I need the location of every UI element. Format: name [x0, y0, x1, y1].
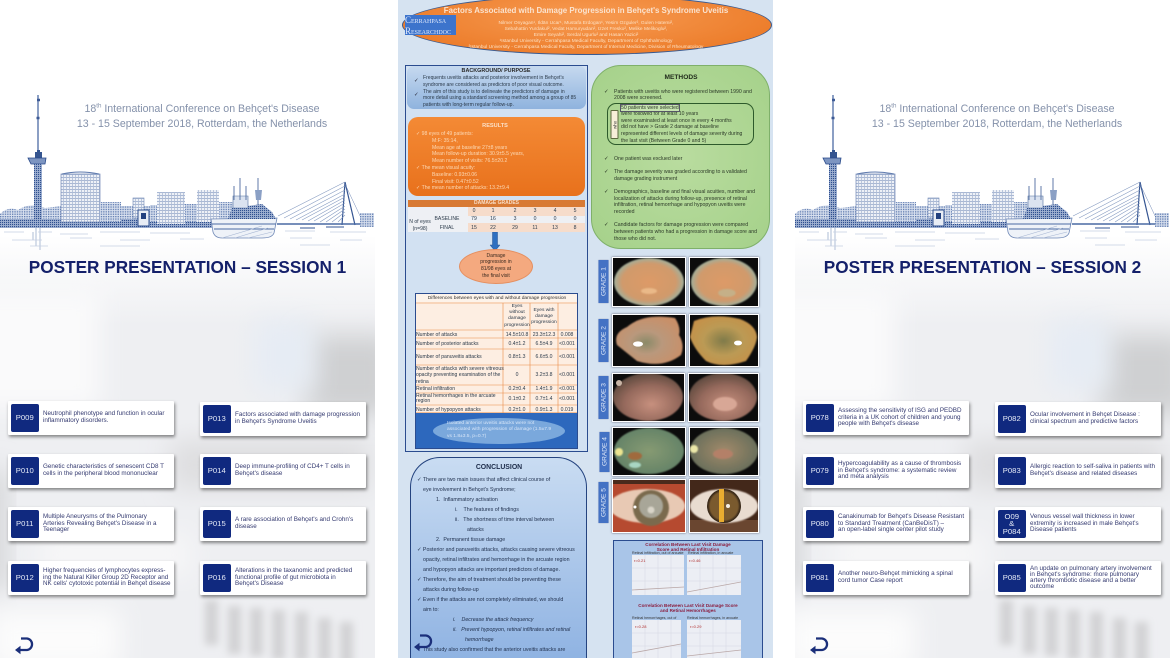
- card P010: cells in the peripheral blood mononuclear: [43, 470, 158, 477]
- card P078: [803, 401, 969, 435]
- card P078: P078: [811, 413, 829, 422]
- card P009: Neutrophil phenotype and function in ocular: [43, 410, 164, 417]
- table: damage grades: 0: [473, 208, 475, 214]
- card P010: Genetic characteristics of senescent CD8 T: [43, 463, 164, 470]
- panel: background and purpose: [407, 66, 586, 109]
- table: differences: Number of attacks with severe vitreous: [416, 366, 504, 372]
- table: differences: 23.3±12.3: [533, 332, 555, 338]
- table: damage grades: 0: [574, 216, 576, 222]
- card P085: in Behçet's syndrome: more pulmonary: [1030, 571, 1139, 578]
- card P079: [803, 454, 969, 488]
- label: grade 5: [599, 482, 608, 523]
- conclusion text: ✓ This study also confirmed that the anterior uveitis attacks are: [417, 647, 565, 653]
- conclusion text: attacks during follow-up: [423, 587, 479, 593]
- table: differences: damage: [508, 316, 526, 321]
- card P082: [995, 402, 1161, 436]
- conclusion heading: CONCLUSION: [476, 464, 522, 471]
- card P012: NK cells' cytotoxic potential in Behçet disease: [43, 580, 171, 587]
- card P009: inflammatory disorders.: [43, 417, 108, 424]
- card P083: Behçet's disease and related diseases: [1030, 470, 1137, 477]
- results text: ✓ 98 eyes of 49 patients:: [416, 131, 473, 137]
- panel: methods: ✓: [604, 169, 609, 175]
- header ellipse: [402, 0, 772, 55]
- panel: left column frame: [405, 65, 588, 452]
- card P080: an open-label single center pilot study: [838, 526, 944, 533]
- card P078: criteria in a UK cohort of children and young: [838, 414, 961, 421]
- background text: Frequents uveitis attacks and posterior involvement in Behçet's: [423, 75, 564, 81]
- poster title: Factors Associated with Damage Progression in Behçet's Syndrome Uveitis: [444, 6, 728, 15]
- authors: ¹Istanbul University - Cerrahpasa Medical Faculty, Department of Ophthalmology: [500, 39, 672, 44]
- card P016: functional profile of gut microbiota in: [235, 574, 336, 581]
- image: grade 1 right: [689, 257, 759, 307]
- panel: methods: infiltration, retinal hemorrhage and hypopyon uveitis were: [614, 202, 746, 208]
- selection criteria: represented different levels of damage severity during: [621, 131, 742, 137]
- card P016: P016: [208, 573, 226, 582]
- chart: infiltration in arcuate: [687, 555, 741, 595]
- chart: infiltration in arcuate: r=0.46: [689, 558, 701, 563]
- image: grade 5 right: [689, 479, 759, 533]
- conclusion text: attacks: [467, 527, 484, 533]
- panel: methods: The damage severity was graded according to a validated: [614, 169, 747, 175]
- methods heading: METHODS: [665, 74, 697, 81]
- card P085: [995, 561, 1161, 595]
- panel: correlation charts: [613, 540, 763, 658]
- table: differences: opacity preventing examination of the: [416, 372, 500, 378]
- conclusion text: opacity, retinal infiltrates and hemorrhage in the arcuate region: [423, 557, 570, 563]
- image: grade 5 left: [612, 479, 686, 533]
- damage progression text: the final visit: [482, 273, 510, 279]
- conclusion text: [417, 476, 575, 653]
- image: grade 4 left: [612, 427, 686, 476]
- table: differences: 0.019: [561, 406, 573, 412]
- table: differences: <0.001: [559, 386, 575, 392]
- conclusion text: ✓ Therefore, the aim of treatment should be preventing these: [417, 577, 561, 583]
- card P080: P080: [811, 519, 829, 528]
- table: damage grades: 8: [574, 225, 576, 231]
- panel: methods: ✓: [604, 156, 609, 162]
- card P016: Alterations in the taxanomic and predicted: [235, 567, 352, 574]
- table: differences: <0.001: [559, 341, 575, 347]
- table: damage grades: 22: [490, 225, 496, 231]
- authors: Sebahattin Yurdakul², Vedat Hamuryudan², Izzet Fresko², Melike Melikoglu²,: [505, 27, 667, 32]
- chart heading: infiltration: Correlation Between Last Visit Damage: [645, 542, 731, 546]
- chart heading: hemorrhages: Correlation Between Last Visit Damage Score: [638, 603, 738, 608]
- card P012: [8, 561, 174, 595]
- card P013: Factors associated with damage progression: [235, 411, 360, 418]
- table: differences: 0.008: [561, 332, 573, 338]
- table: damage grades: 79: [471, 216, 477, 222]
- card P009: [8, 401, 174, 435]
- label: grade 2: GRADE 2: [600, 326, 607, 355]
- table: differences: 1.4±1.9: [536, 386, 552, 392]
- image: grade 3 left: [612, 373, 685, 422]
- card P014: [200, 454, 366, 488]
- selection criteria: 50 patients were selected: [621, 104, 679, 110]
- card O09 and P084: [995, 507, 1161, 541]
- chart: hemorrhages in arcuate: [687, 620, 741, 658]
- table: differences: 6.6±5.0: [536, 354, 552, 360]
- card P085: artery thrombotic disease and a better: [1030, 577, 1136, 584]
- table: differences: 6.5±4.9: [536, 341, 552, 347]
- panel: correlation charts: Retinal infiltration, in arcuate: [688, 551, 733, 555]
- logo: [405, 15, 456, 35]
- table: differences: damage: [535, 314, 553, 319]
- card P085: An update on pulmonary artery involvement: [1030, 565, 1152, 572]
- table: differences: without: [509, 310, 525, 315]
- label: grade 3: GRADE 3: [600, 383, 607, 412]
- table: differences: Number of posterior attacks: [416, 341, 479, 347]
- table: differences: 0.8±1.3: [509, 354, 525, 360]
- selection criteria: were followed for at least 10 years: [621, 111, 698, 117]
- conclusion text: hemorrhage: [465, 637, 494, 643]
- panel: methods: localization of attacks during follow-up, presence of retinal: [614, 196, 747, 202]
- table: differences: Retinal hemorrhages in the arcuate: [416, 392, 496, 398]
- anterior uveitis text: associated with progression of damage (1.5±7.9: [447, 427, 551, 432]
- table: differences: progression: [531, 320, 557, 325]
- panel: poster: [398, 0, 773, 658]
- panel: methods: damage grading instrument: [614, 176, 677, 182]
- panel: conclusion: [410, 457, 587, 658]
- background heading: BACKGROUND/ PURPOSE: [462, 68, 530, 74]
- card P011: Teenager: [43, 526, 69, 533]
- table: differences: 14.5±10.8: [506, 332, 528, 338]
- conclusion text: and hypopyon attacks are important predictors of damage.: [423, 567, 560, 573]
- conference title: [872, 102, 1122, 130]
- table: damage grades: DAMAGE GRADES: [474, 200, 519, 206]
- conclusion text: ✓ Posterior and panuveitis attacks, attacks causing severe vitreous: [417, 547, 575, 553]
- card O09 and P084: extremity is increased in male Behçet's: [1030, 520, 1139, 527]
- chart heading: hemorrhages: and Retinal Hemorrhages: [660, 608, 716, 613]
- pill: who: who: [612, 120, 617, 128]
- authors: Nilmer Onyagan¹, Ildän Ucar¹, Mustafa Erdogan¹, Yesim Ozguler², Gulen Hatemi²,: [499, 20, 673, 26]
- results text: Final visit: 0.47±0.52: [432, 179, 479, 185]
- results heading: RESULTS: [482, 123, 508, 129]
- table: damage grades: N of eyes: [409, 219, 431, 225]
- chart heading: infiltration: Score and Retinal Infiltration: [657, 547, 719, 552]
- background text: more detail using a standard screening method among a group of 85: [423, 95, 576, 101]
- image: grade 1 left: [612, 257, 686, 307]
- table: damage grades: 1: [492, 208, 494, 214]
- check marks: ✓: [414, 92, 419, 98]
- damage progression text: Damage: [487, 252, 505, 258]
- table: damage grades: FINAL: [440, 225, 454, 231]
- card P015: disease: [235, 523, 257, 530]
- arrow: down to progression: [490, 232, 500, 250]
- results text: Mean age at baseline 27±8 years: [432, 145, 507, 151]
- chart: infiltration out of arcuate: r=0.21: [634, 558, 646, 563]
- panel: methods: ✓: [604, 189, 609, 195]
- conclusion text: 2. Permanent tissue damage: [436, 537, 505, 543]
- table: differences: region: [416, 398, 430, 404]
- label: grade 1: [599, 260, 608, 303]
- conclusion text: ii. Prevent hypopyon, retinal infiltrates and retinal: [453, 627, 570, 633]
- conclusion text: ii. The shortness of time interval between: [455, 517, 554, 523]
- panel: methods: Candidate factors for damage progression were compared: [614, 222, 748, 228]
- chart: hemorrhages out of arcuate: [632, 620, 681, 658]
- card P013: in Behçet's Syndrome Uveitis: [235, 418, 317, 425]
- panel: results: [408, 117, 585, 196]
- card O09 and P084: P084: [1003, 527, 1021, 536]
- table: differences: Differences between eyes with and without damage progression: [428, 296, 566, 301]
- card P014: Deep immune-profiling of CD4+ T cells in: [235, 463, 350, 470]
- selection criteria: [620, 104, 742, 144]
- conference title: 18th International Conference on Behçet's Disease: [879, 102, 1115, 115]
- background text: patients with long-term regular follow-up.: [423, 102, 514, 108]
- table: differences: 0.1±0.2: [509, 396, 525, 402]
- card P011: P011: [16, 519, 33, 528]
- label: grade 2: [599, 319, 608, 362]
- table: damage grades: 29: [512, 225, 518, 231]
- table: differences: 0.2±1.0: [509, 406, 525, 412]
- table: differences: 0.2±0.4: [509, 386, 525, 392]
- session heading: POSTER PRESENTATION – SESSION 1: [29, 257, 346, 277]
- chart: hemorrhages out of arcuate: r=0.28: [635, 624, 647, 629]
- image: grade 2 right: [689, 314, 759, 367]
- anterior uveitis text: vs 1.8±3.5, p=0.7): [447, 434, 486, 439]
- conference title: 18th International Conference on Behçet's Disease: [84, 102, 320, 115]
- table: damage grades: 16: [490, 216, 496, 222]
- conclusion text: eye involvement in Behçet's Syndrome;: [423, 487, 516, 493]
- authors: [468, 20, 704, 50]
- card O09 and P084: &: [1009, 519, 1014, 528]
- table: differences: 0.7±1.4: [536, 396, 552, 402]
- label: grade 4: GRADE 4: [601, 438, 608, 466]
- methods intro: Patients with uveitis who were registered between 1990 and: [614, 88, 752, 94]
- results text: M:F: 35:14,: [432, 138, 458, 144]
- chart: hemorrhages in arcuate: r=0.29: [690, 624, 702, 629]
- card P011: [8, 507, 174, 541]
- table: differences: Number of hypopyon attacks: [416, 406, 481, 412]
- card P012: P012: [16, 573, 34, 582]
- results text: ✓ The mean visual acuity:: [416, 165, 475, 171]
- table: damage grades: (n=98): [413, 226, 427, 232]
- card P082: P082: [1003, 414, 1021, 423]
- table: differences: <0.001: [559, 396, 575, 402]
- chart: infiltration out of arcuate: [632, 555, 684, 595]
- conclusion text: ✓ Even if the attacks are not completely eliminated, we should: [417, 597, 563, 603]
- card P011: Arteries Revealing Behçet's Disease in a: [43, 520, 157, 527]
- sublabels: Retinal hemorrhages, out of: [632, 616, 676, 620]
- results text: [416, 131, 524, 191]
- damage progression text: 81/98 eyes at: [481, 266, 511, 272]
- card P011: Multiple Aneurysms of the Pulmonary: [43, 513, 147, 520]
- card P080: Canakinumab for Behçet's Disease Resistant: [838, 513, 964, 520]
- pill: who: [611, 110, 618, 138]
- icon: back arrow: [810, 637, 828, 654]
- image: grade 3 right: [688, 373, 759, 422]
- conclusion text: 1. Inflammatory activation: [436, 497, 498, 503]
- card P081: P081: [811, 573, 829, 582]
- card P079: P079: [811, 466, 829, 475]
- card P085: P085: [1003, 573, 1021, 582]
- damage progression text: progression in: [480, 259, 512, 265]
- panel: session 2: [795, 95, 1170, 658]
- table: damage grades: [408, 200, 585, 232]
- card P016: Behçet's Disease: [235, 580, 283, 587]
- panel: methods: recorded: [614, 209, 634, 215]
- table: differences: Number of attacks: [416, 332, 457, 338]
- image: grade 2 left: [612, 314, 686, 367]
- sublabels: Retinal infiltration, out of arcuate: [632, 551, 684, 555]
- card P083: [995, 454, 1161, 488]
- conclusion text: aim to:: [423, 607, 439, 613]
- card P013: [200, 402, 366, 436]
- table: differences: <0.001: [559, 354, 575, 360]
- panel: session 1: [0, 95, 375, 658]
- table: damage grades: 0: [554, 216, 556, 222]
- card P015: P015: [208, 519, 226, 528]
- chart heading: infiltration: [645, 542, 731, 552]
- card P081: [803, 561, 969, 595]
- conclusion text: i. The features of findings: [455, 507, 519, 513]
- results text: Mean follow-up duration: 30.9±5.5 years,: [432, 151, 524, 157]
- results text: Mean number of visits: 76.5±20.2: [432, 158, 507, 164]
- card P083: P083: [1003, 466, 1021, 475]
- table: differences: Retinal infiltration: [416, 386, 455, 392]
- selection box: [607, 102, 754, 144]
- card P079: and meta analysis: [838, 473, 889, 480]
- card O09 and P084: O09: [1004, 512, 1019, 521]
- card P010: [8, 454, 174, 488]
- card P083: Allergic reaction to self-saliva in patients with: [1030, 463, 1155, 470]
- ellipse: anterior uveitis note: [433, 418, 565, 444]
- authors: ²Istanbul University - Cerrahpasa Medical Faculty, Department of Internal Medicine, Division of Rheumatology: [469, 45, 703, 50]
- panel: methods: Demographics, baseline and final visual acuities, number and: [614, 189, 755, 195]
- panel: methods: those who did not.: [614, 236, 656, 242]
- card P079: Hypercoagulability as a cause of thrombosis: [838, 460, 961, 467]
- card P016: [200, 561, 366, 595]
- check marks: [414, 78, 419, 98]
- conclusion text: ✓ There are two main issues that affect clinical course of: [417, 476, 550, 482]
- table: differences: <0.001: [559, 372, 575, 378]
- table: damage grades: 11: [532, 225, 538, 231]
- panel: methods: ✓: [604, 222, 609, 228]
- results text: ✓ The mean number of attacks: 13.2±9.4: [416, 185, 509, 191]
- icon: back arrow: [15, 637, 34, 654]
- label: grade 4: [600, 432, 610, 472]
- ellipse: damage progression: [459, 249, 533, 284]
- table: damage grades: 13: [552, 225, 558, 231]
- card P079: in Behçet's syndrome: a systematic review: [838, 467, 956, 474]
- check marks: ✓: [414, 78, 419, 84]
- card P015: A rare association of Behçet's and Crohn's: [235, 516, 353, 523]
- card O09 and P084: Disease patients: [1030, 526, 1077, 533]
- selection criteria: did not have > Grade 2 damage at baseline: [621, 124, 719, 130]
- card P080: to Standard Treatment (CanBeDisT) –: [838, 520, 944, 527]
- table: damage grades: 5: [574, 208, 576, 214]
- selection criteria: were examinated at least once in every 4 months: [621, 118, 732, 124]
- image: grade 4 right: [689, 427, 759, 476]
- chart heading: hemorrhages: [638, 603, 738, 613]
- table: differences: retina: [416, 379, 429, 385]
- background text: The aim of this study is to delineate the predictors of damage in: [423, 88, 565, 94]
- panel: methods: between patients who had a progression in damage score and: [614, 229, 757, 235]
- table: damage grades: 15: [471, 225, 477, 231]
- background text: [423, 75, 576, 108]
- anterior uveitis text: [447, 420, 551, 439]
- label: grade 5: GRADE 5: [600, 488, 607, 517]
- card P014: P014: [208, 466, 226, 475]
- table: differences: Eyes with: [534, 308, 554, 313]
- anterior uveitis text: Isolated anterior uveitis attacks were not: [447, 421, 534, 426]
- card O09 and P084: Venous vessel wall thickness in lower: [1030, 513, 1135, 520]
- label: grade 1: GRADE 1: [600, 267, 607, 296]
- table: differences: 0.4±1.2: [509, 341, 525, 347]
- card P009: P009: [16, 413, 34, 422]
- panel: correlation charts: Retinal hemorrhages, in arcuate: [687, 616, 738, 620]
- selection criteria: the last visit (Between Grade 0 and 5): [621, 138, 706, 144]
- table: differences: [415, 293, 578, 449]
- icon: back arrow: [414, 634, 432, 652]
- methods intro: [614, 88, 752, 101]
- card P015: [200, 507, 366, 541]
- session heading: POSTER PRESENTATION – SESSION 2: [824, 257, 1141, 277]
- card P081: cord tumor Case report: [838, 577, 903, 584]
- table: differences: 0: [516, 372, 518, 378]
- check marks: ✓: [604, 89, 609, 95]
- background text: syndrome are considered as predictors of poor visual outcome.: [423, 82, 564, 88]
- conference title: [77, 102, 327, 130]
- results text: Baseline: 0.93±0.06: [432, 172, 477, 178]
- table: differences: 3.2±3.8: [536, 372, 552, 378]
- table: differences: Eyes: [512, 304, 522, 309]
- conclusion text: i. Decrease the attack frequency: [453, 617, 533, 623]
- card P078: Assessing the sensitivity of ISG and PEDBD: [838, 407, 962, 414]
- card P012: ing the Natural Killer Group 2D Receptor and: [43, 574, 168, 581]
- card P082: Ocular involvement in Behçet Disease :: [1030, 411, 1140, 418]
- table: damage grades: BASELINE: [435, 216, 459, 222]
- panel: methods: [591, 65, 770, 249]
- card P078: people with Behçet's disease: [838, 420, 919, 427]
- conference title: 13 - 15 September 2018, Rotterdam, the Netherlands: [77, 118, 327, 130]
- authors: Emire Seyahi², Serdal Ugurlu² and Hasan Yazici²: [534, 33, 638, 38]
- card P013: P013: [208, 414, 226, 423]
- table: differences: progression: [504, 323, 530, 328]
- table: damage grades: 3: [534, 208, 536, 214]
- card P012: Higher frequencies of lymphocytes express-: [43, 567, 166, 574]
- label: grade 3: [599, 376, 608, 419]
- card P080: [803, 507, 969, 541]
- table: damage grades: 3: [514, 216, 516, 222]
- card P010: P010: [16, 466, 34, 475]
- card P082: clinical spectrum and predictive factors: [1030, 418, 1138, 425]
- damage progression text: [480, 252, 512, 279]
- methods intro: 2008 were screened.: [614, 95, 662, 101]
- table: differences: Number of panuveitis attacks: [416, 354, 482, 360]
- table: damage grades: 0: [534, 216, 536, 222]
- table: damage grades: 2: [514, 208, 516, 214]
- conference title: 13 - 15 September 2018, Rotterdam, the Netherlands: [872, 118, 1122, 130]
- card P081: Another neuro-Behçet mimicking a spinal: [838, 570, 953, 577]
- table: damage grades: 4: [554, 208, 556, 214]
- table: differences: 0.9±1.3: [536, 406, 552, 412]
- card P085: outcome: [1030, 583, 1054, 590]
- card P014: Behçet's disease: [235, 470, 282, 477]
- methods list: One patient was exclued later: [614, 156, 682, 162]
